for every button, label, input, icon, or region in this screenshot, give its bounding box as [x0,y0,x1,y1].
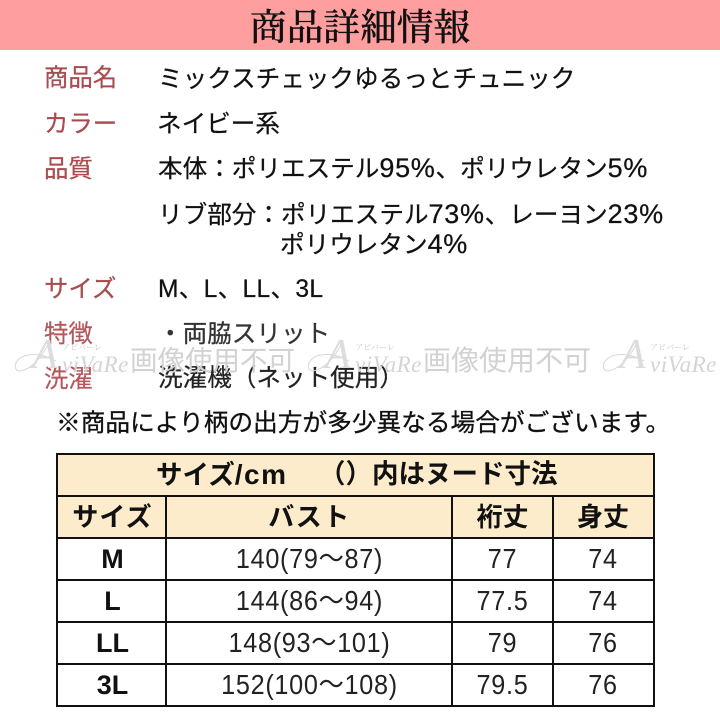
bust L: 144(86～94) [236,585,383,616]
size 3L: 3L [97,670,128,700]
value: features: ・両脇スリット [158,321,330,348]
sleeve L: 77.5 [477,585,528,616]
watermark logo 3: viVaRe [650,352,717,377]
value: product name: ミックスチェックゆるっとチュニック [158,66,575,93]
sleeve LL: 79 [488,627,517,658]
watermark text 2: 画像使用不可 [423,345,591,376]
watermark logo 1: viVaRe [62,352,129,377]
column head: バスト: バスト [268,502,351,532]
bust 3L: 152(100～108) [221,669,398,700]
size LL: LL [96,628,129,658]
value: rib material: リブ部分：ポリエステル73%、レーヨン23% [158,199,664,229]
bust M: 140(79～87) [236,543,383,574]
row: LL [96,627,618,658]
column head: サイズ: サイズ [72,502,153,532]
table title: （）内はヌード寸法 [319,459,558,489]
value: rib material: ポリウレタン4% [280,229,468,259]
watermark [14,332,717,378]
length 3L: 76 [588,669,618,700]
label: 品質: 品質 [44,156,93,183]
watermark logo 2: アビバーレ [355,343,395,352]
watermark logo 1: アビバーレ [62,343,102,352]
table header background [56,453,655,538]
watermark logo 1 [14,332,129,378]
label: 特徴: 特徴 [44,321,93,348]
watermark logo 2 [308,332,422,378]
watermark logo 3: A [620,332,646,378]
label: 商品名: 商品名 [44,65,117,92]
watermark logo 3: アビバーレ [650,343,690,352]
watermark logo 3 [602,332,717,378]
size table [56,453,655,707]
table title: サイズ/cm [156,459,287,490]
length LL: 76 [588,627,618,658]
value: rib material [158,199,664,259]
size M: M [101,544,124,574]
label: サイズ: サイズ [44,276,116,303]
title: 商品詳細情報 [250,7,470,48]
value: sizes: M、L、LL、3L [158,276,323,303]
sleeve 3L: 79.5 [477,669,528,700]
bust LL: 148(93～101) [228,627,391,658]
label: 洗濯: 洗濯 [44,366,93,393]
length L: 74 [588,585,618,616]
row: L [104,585,618,616]
watermark logo 2: A [325,332,351,378]
value: colour: ネイビー系 [157,111,280,138]
row: M [101,543,618,574]
value: body material: 本体：ポリエステル95%、ポリウレタン5% [158,153,648,183]
label: カラー: カラー [44,111,117,138]
watermark text 1: 画像使用不可 [130,345,295,376]
column head: 裄丈: 裄丈 [476,502,528,532]
length M: 74 [588,543,618,574]
watermark logo 1: A [32,332,58,378]
value: washing: 洗濯機（ネット使用） [158,365,404,392]
table title [156,459,558,490]
title banner [0,0,720,50]
column head: 身丈: 身丈 [577,502,629,532]
sleeve M: 77 [488,543,517,574]
size L: L [104,586,121,616]
note: ※商品により柄の出方が多少異なる場合がございます。 [56,410,670,437]
watermark logo 2: viVaRe [355,352,422,377]
row: 3L [97,669,618,700]
